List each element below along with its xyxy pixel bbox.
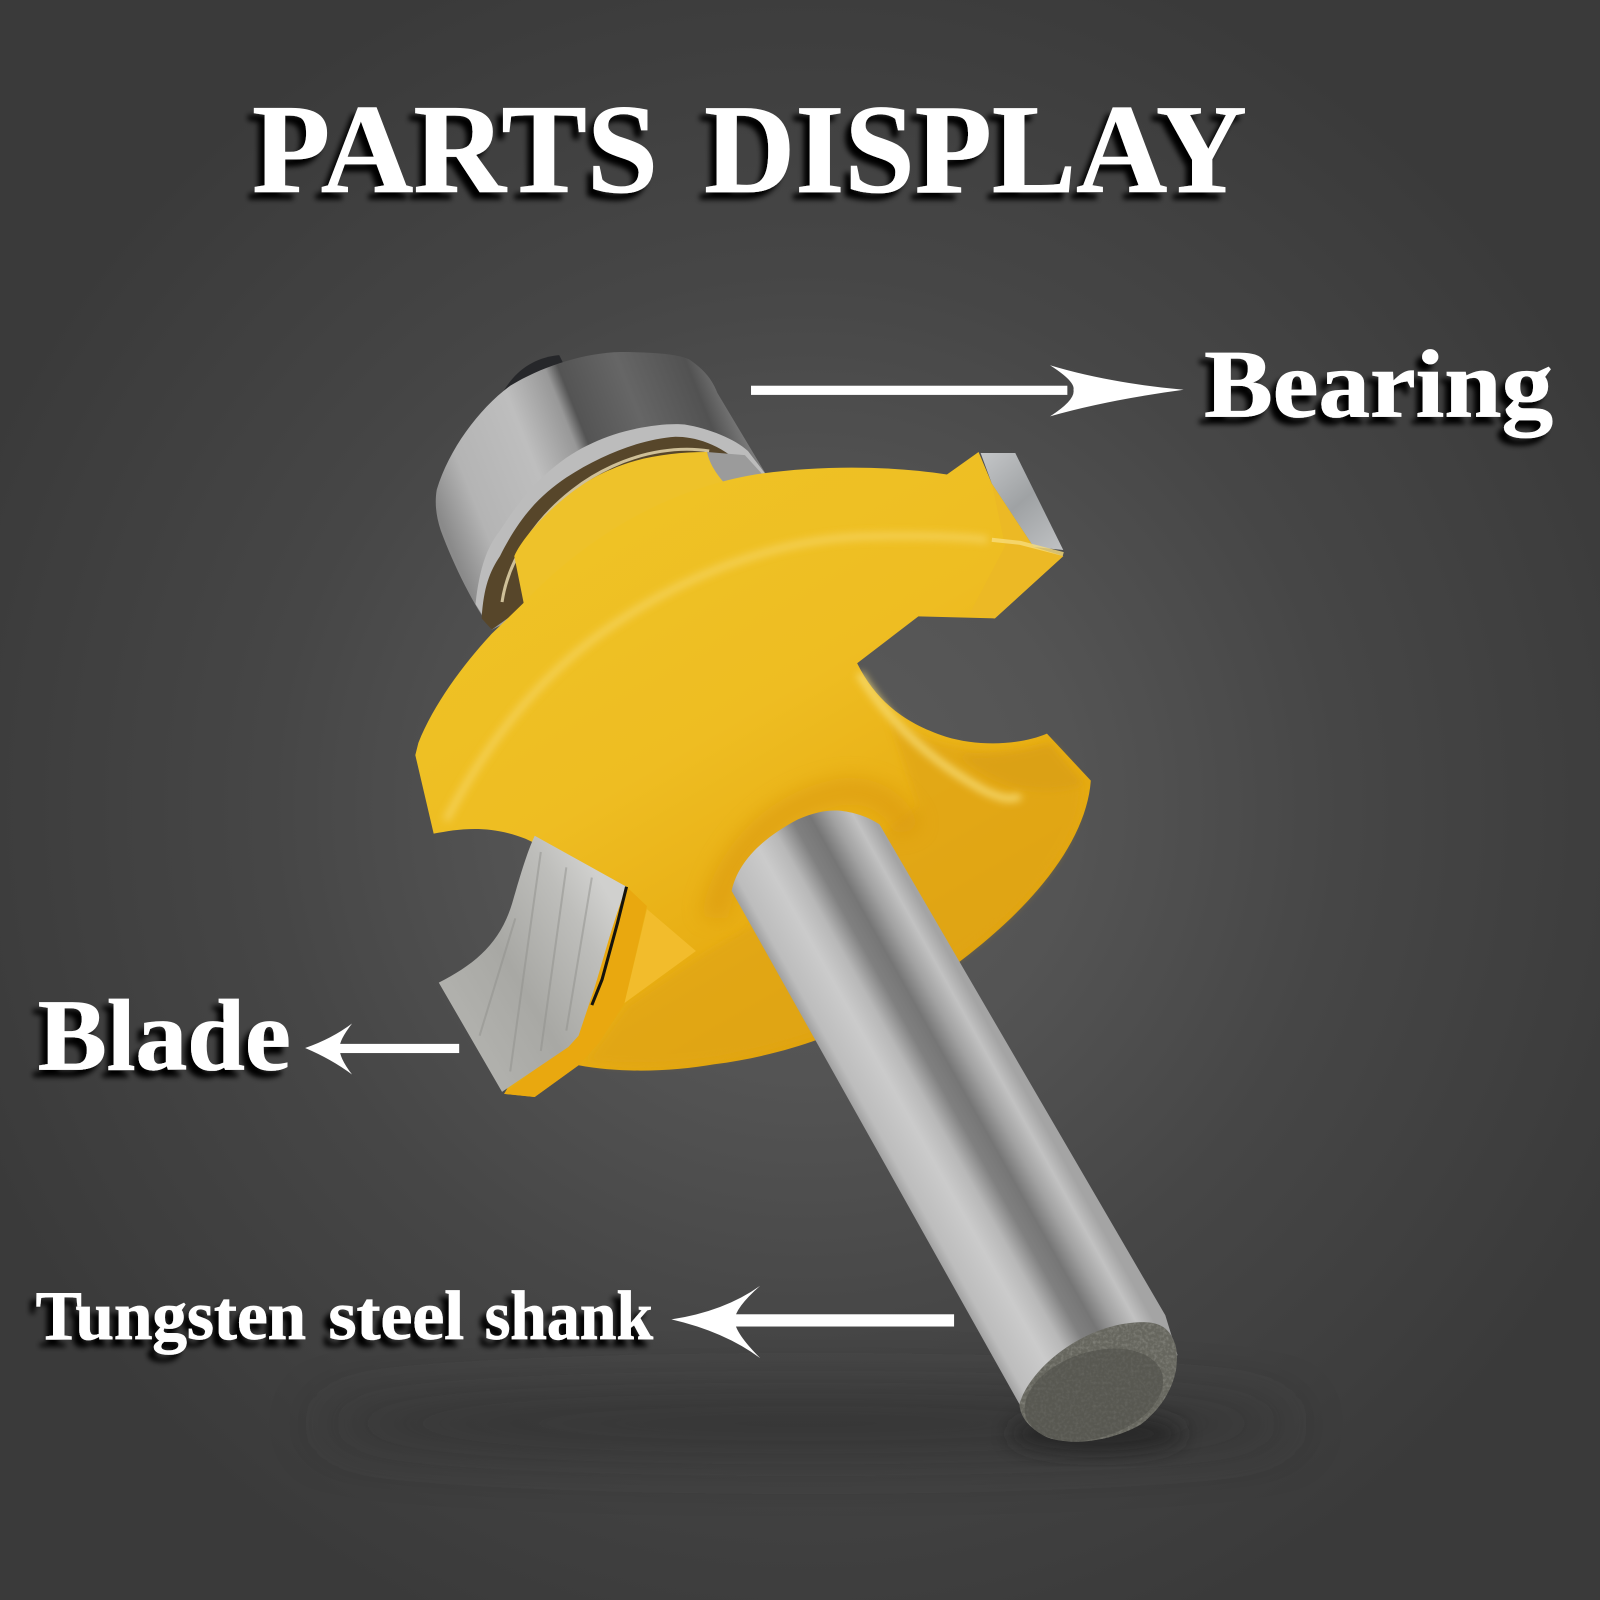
title <box>252 78 1247 220</box>
bearing outer race <box>436 352 767 630</box>
arrow: shank <box>671 1286 954 1358</box>
blade top right <box>969 453 1063 618</box>
yellow body silhouette <box>415 452 1091 1097</box>
label: tungsten steel shank <box>36 1278 653 1355</box>
yellow strip <box>504 887 647 1097</box>
neck steel insert <box>707 452 765 489</box>
shank body <box>732 810 1178 1439</box>
bearing <box>436 352 767 630</box>
steel tip <box>981 453 1063 550</box>
label: blade: Blade <box>38 979 291 1092</box>
highlight on rim <box>446 536 988 820</box>
label: tungsten steel shank: steel <box>329 1278 464 1355</box>
router bit product <box>415 352 1184 1458</box>
label: tungsten steel shank: shank <box>485 1278 653 1355</box>
arrow: blade <box>305 1023 459 1074</box>
shank <box>732 810 1184 1458</box>
title: PARTS <box>252 78 658 220</box>
label: bearing: Bearing <box>1204 330 1553 437</box>
right lobe highlight <box>959 743 1084 790</box>
bearing retaining screw <box>502 355 571 429</box>
bearing lower light band <box>476 424 767 630</box>
shank end cap <box>1019 1322 1177 1442</box>
arrow: bearing <box>751 365 1184 416</box>
yellow triangle <box>624 909 696 1003</box>
washer ring <box>482 437 745 630</box>
shank base shadow <box>714 791 908 918</box>
fin face <box>969 484 1063 618</box>
yellow neck <box>514 452 776 612</box>
title: DISPLAY <box>704 78 1247 220</box>
steel blade <box>439 836 627 1092</box>
ridge highlight <box>859 673 1020 798</box>
label: tungsten steel shank: Tungsten <box>36 1278 306 1355</box>
contact shadow <box>1010 1413 1184 1454</box>
floor shadow <box>316 1393 1296 1454</box>
blade lower left <box>439 836 696 1097</box>
back disc shading <box>587 714 1082 1065</box>
